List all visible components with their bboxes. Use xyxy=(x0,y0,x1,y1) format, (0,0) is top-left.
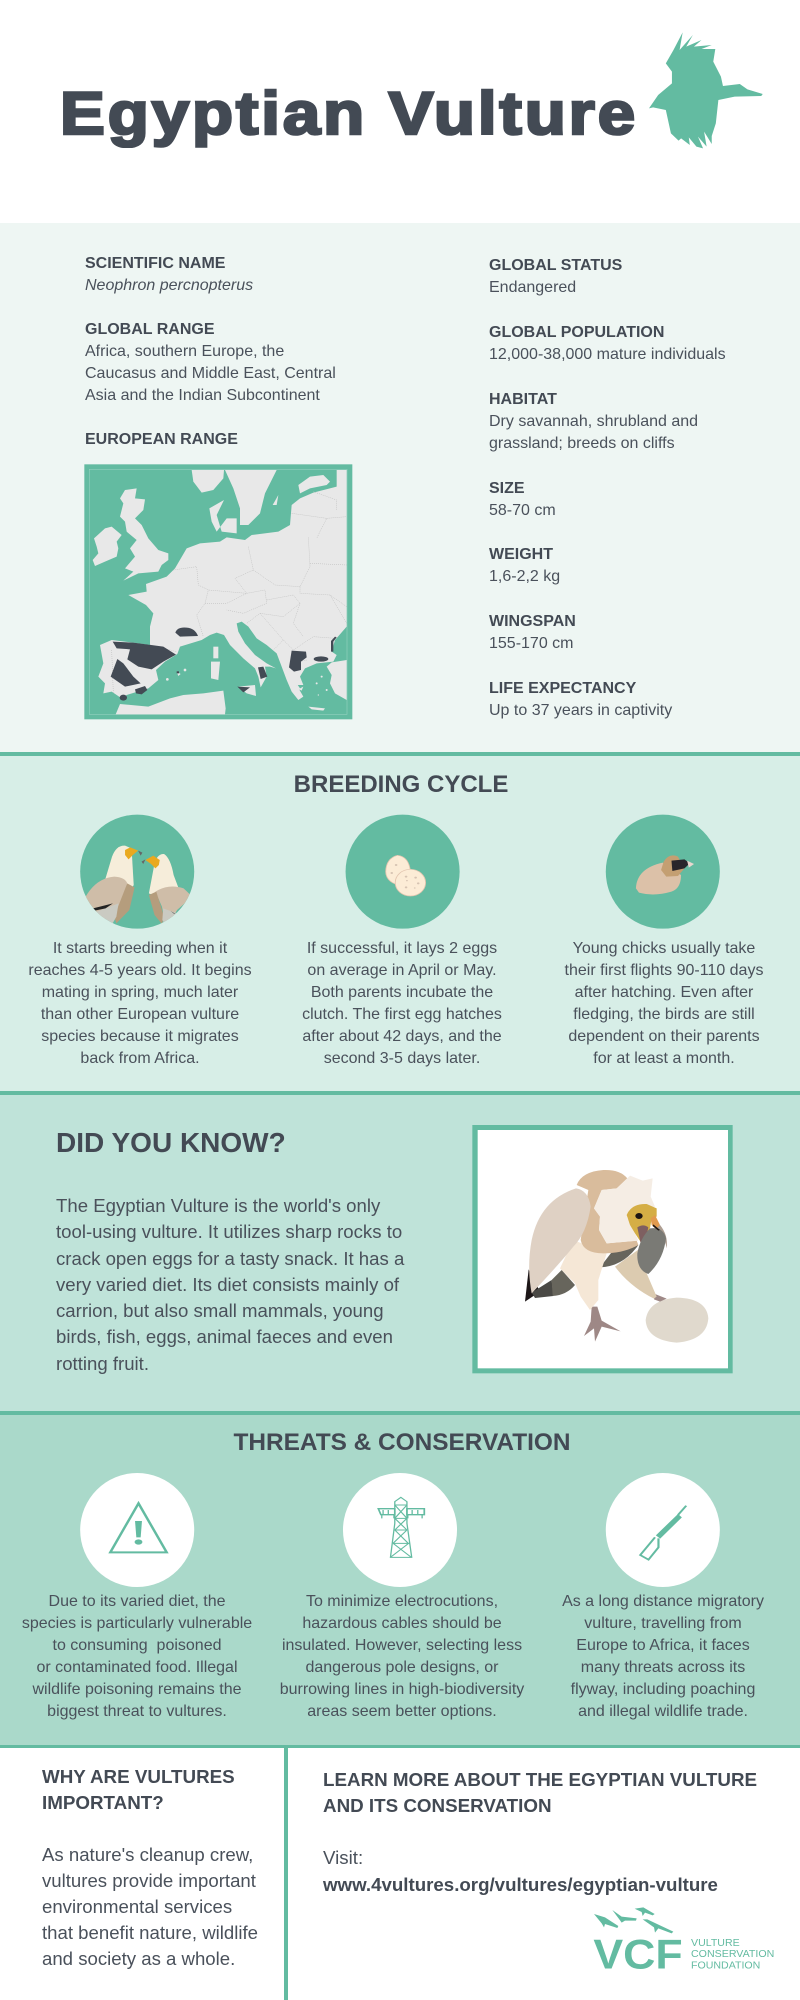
fact: habitat xyxy=(489,391,698,452)
heading: european range: EUROPEAN RANGE xyxy=(85,431,238,448)
text: did you know body: crack open eggs for a tasty snack. It has a xyxy=(56,1248,404,1269)
divider: footer vertical xyxy=(284,1747,288,2000)
panel: breeding cycle xyxy=(0,752,800,1093)
text: breeding step 3: Young chicks usually take xyxy=(573,940,755,957)
text: threat 2: areas seem better options. xyxy=(307,1703,497,1720)
fact: scientific name: SCIENTIFIC NAME xyxy=(85,255,225,272)
text: threat 2 xyxy=(280,1593,524,1720)
text: breeding step 2: on average in April or May. xyxy=(307,962,497,979)
text: breeding step 3: their first flights 90-110 days xyxy=(565,962,763,979)
logo: vulture conservation foundation xyxy=(593,1907,774,1977)
fact: wingspan xyxy=(489,613,576,652)
text: why vultures matter xyxy=(42,1844,258,1969)
fact: global population: GLOBAL POPULATION xyxy=(489,324,664,341)
heading: breeding cycle: BREEDING CYCLE xyxy=(294,771,508,798)
text: did you know body: tool-using vulture. It utilizes sharp rocks to xyxy=(56,1221,402,1242)
text: visit link: www.4vultures.org/vultures/egyptian-vulture xyxy=(323,1874,718,1894)
icon: chick xyxy=(606,815,720,929)
fact: weight: 1,6-2,2 kg xyxy=(489,568,560,585)
text: did you know body: birds, fish, eggs, animal faeces and even xyxy=(56,1326,393,1347)
text: breeding step 1: It starts breeding when it xyxy=(53,940,227,957)
fact: weight: WEIGHT xyxy=(489,546,553,563)
text: threat 1: or contaminated food. Illegal xyxy=(36,1659,238,1676)
text: why vultures matter: As nature's cleanup crew, xyxy=(42,1844,253,1865)
text: did you know body: very varied diet. Its diet consists mainly of xyxy=(56,1274,399,1295)
logo: vulture conservation foundation: VULTURE xyxy=(691,1938,740,1949)
text: threat 3: and illegal wildlife trade. xyxy=(578,1703,748,1720)
text: breeding step 3: dependent on their parents xyxy=(568,1028,760,1045)
title: Egyptian Vulture xyxy=(60,80,638,147)
text: breeding step 1: reaches 4-5 years old. It begins xyxy=(28,962,252,979)
text: breeding step 2: after about 42 days, and the xyxy=(302,1028,502,1045)
fact: global range: GLOBAL RANGE xyxy=(85,321,214,338)
icon: rifle xyxy=(606,1473,720,1587)
icons: threats xyxy=(80,1473,720,1587)
panel: threats and conservation xyxy=(0,1411,800,1747)
text: breeding step 2: second 3-5 days later. xyxy=(324,1050,480,1067)
text: did you know body: The Egyptian Vulture is the world's only xyxy=(56,1195,380,1216)
text: visit link: Visit: xyxy=(323,1847,363,1868)
fact: global range: Africa, southern Europe, the xyxy=(85,343,284,360)
text: threat 3: As a long distance migratory xyxy=(562,1593,764,1610)
text: threat 3: vulture, travelling from xyxy=(584,1615,742,1632)
text: breeding step 1: mating in spring, much later xyxy=(42,984,238,1001)
heading: why are vultures important: IMPORTANT? xyxy=(42,1792,164,1813)
text: breeding step 2 xyxy=(302,940,502,1067)
text: threat 2: burrowing lines in high-biodiversity xyxy=(280,1681,524,1698)
icon: two eggs xyxy=(346,815,460,929)
fact: global status: Endangered xyxy=(489,279,576,296)
logo: vulture conservation foundation: VCF xyxy=(593,1931,683,1977)
fact: scientific name: Neophron percnopterus xyxy=(85,277,253,294)
text: breeding step 3: fledging, the birds are still xyxy=(573,1006,755,1023)
fact: global status: GLOBAL STATUS xyxy=(489,257,622,274)
fact: global range xyxy=(85,321,336,404)
icon: vulture pair xyxy=(80,815,194,929)
text: threat 2: insulated. However, selecting less xyxy=(282,1637,522,1654)
fact: life expectancy: LIFE EXPECTANCY xyxy=(489,680,636,697)
fact: size: 58-70 cm xyxy=(489,502,556,519)
heading: why are vultures important: WHY ARE VULTURES xyxy=(42,1766,235,1787)
text: breeding step 1: species because it migrates xyxy=(41,1028,239,1045)
logo: vulture conservation foundation: CONSERVATION xyxy=(691,1949,774,1960)
text: threat 1: biggest threat to vultures. xyxy=(47,1703,227,1720)
fact: habitat: HABITAT xyxy=(489,391,557,408)
text: why vultures matter: that benefit nature, wildlife xyxy=(42,1922,258,1943)
icon: power pylon xyxy=(343,1473,457,1587)
text: threat 2: dangerous pole designs, or xyxy=(305,1659,499,1676)
text: did you know body xyxy=(56,1195,404,1374)
fact: global status xyxy=(489,257,622,296)
text: threat 1 xyxy=(22,1593,252,1720)
text: threat 3 xyxy=(562,1593,764,1720)
fact: global range: Caucasus and Middle East, Central xyxy=(85,365,336,382)
text: threat 2: hazardous cables should be xyxy=(302,1615,502,1632)
heading: did you know: DID YOU KNOW? xyxy=(56,1127,286,1158)
text: threat 1: to consuming poisoned xyxy=(52,1637,221,1654)
text: breeding step 3 xyxy=(564,940,763,1067)
illustration: vulture cracking an egg with a rock xyxy=(472,1125,733,1374)
text: breeding step 1: than other European vulture xyxy=(41,1006,239,1023)
fact: global population xyxy=(489,324,726,363)
logo: vulture conservation foundation: FOUNDATION xyxy=(691,1960,760,1971)
text: visit link xyxy=(323,1847,718,1895)
text: breeding step 3: for at least a month. xyxy=(593,1050,735,1067)
fact: life expectancy: Up to 37 years in captivity xyxy=(489,702,672,719)
panel: key facts xyxy=(0,223,800,752)
fact: wingspan: WINGSPAN xyxy=(489,613,576,630)
text: why vultures matter: vultures provide important xyxy=(42,1870,256,1891)
text: breeding step 2: Both parents incubate the xyxy=(311,984,493,1001)
text: breeding step 2: clutch. The first egg hatches xyxy=(302,1006,502,1023)
text: breeding step 2: If successful, it lays 2 eggs xyxy=(307,940,497,957)
heading: learn more: LEARN MORE ABOUT THE EGYPTIAN VULTURE xyxy=(323,1769,757,1790)
icon: warning triangle xyxy=(80,1473,194,1587)
heading: why are vultures important xyxy=(42,1766,235,1813)
text: why vultures matter: and society as a whole. xyxy=(42,1948,235,1969)
text: did you know body: rotting fruit. xyxy=(56,1353,149,1374)
text: threat 3: Europe to Africa, it faces xyxy=(576,1637,750,1654)
text: breeding step 1 xyxy=(28,940,252,1067)
fact: global population: 12,000-38,000 mature individuals xyxy=(489,346,726,363)
heading: threats and conservation: THREATS & CONSERVATION xyxy=(234,1429,570,1456)
text: did you know body: carrion, but also small mammals, young xyxy=(56,1300,384,1321)
text: threat 3: many threats across its xyxy=(581,1659,745,1676)
text: threat 3: flyway, including poaching xyxy=(571,1681,755,1698)
fact: habitat: grassland; breeds on cliffs xyxy=(489,435,675,452)
icons: breeding stages xyxy=(80,814,720,929)
fact: size xyxy=(489,480,556,519)
fact: scientific name xyxy=(85,255,253,294)
fact: global range: Asia and the Indian Subcontinent xyxy=(85,387,320,404)
divider: footer top xyxy=(0,1745,800,1748)
fact: habitat: Dry savannah, shrubland and xyxy=(489,413,698,430)
map: european range of the vulture xyxy=(84,464,352,720)
fact: weight xyxy=(489,546,560,585)
heading: learn more xyxy=(323,1769,757,1816)
text: breeding step 3: after hatching. Even after xyxy=(575,984,753,1001)
text: why vultures matter: environmental services xyxy=(42,1896,232,1917)
text: threat 1: Due to its varied diet, the xyxy=(49,1593,225,1610)
panel: did you know xyxy=(0,1091,800,1413)
fact: size: SIZE xyxy=(489,480,525,497)
text: threat 1: species is particularly vulnerable xyxy=(22,1615,252,1632)
heading: learn more: AND ITS CONSERVATION xyxy=(323,1795,552,1816)
text: threat 2: To minimize electrocutions, xyxy=(306,1593,498,1610)
text: breeding step 1: back from Africa. xyxy=(80,1050,200,1067)
icon: flying vulture silhouette xyxy=(649,32,763,148)
fact: wingspan: 155-170 cm xyxy=(489,635,574,652)
text: threat 1: wildlife poisoning remains the xyxy=(32,1681,241,1698)
fact: life expectancy xyxy=(489,680,672,719)
